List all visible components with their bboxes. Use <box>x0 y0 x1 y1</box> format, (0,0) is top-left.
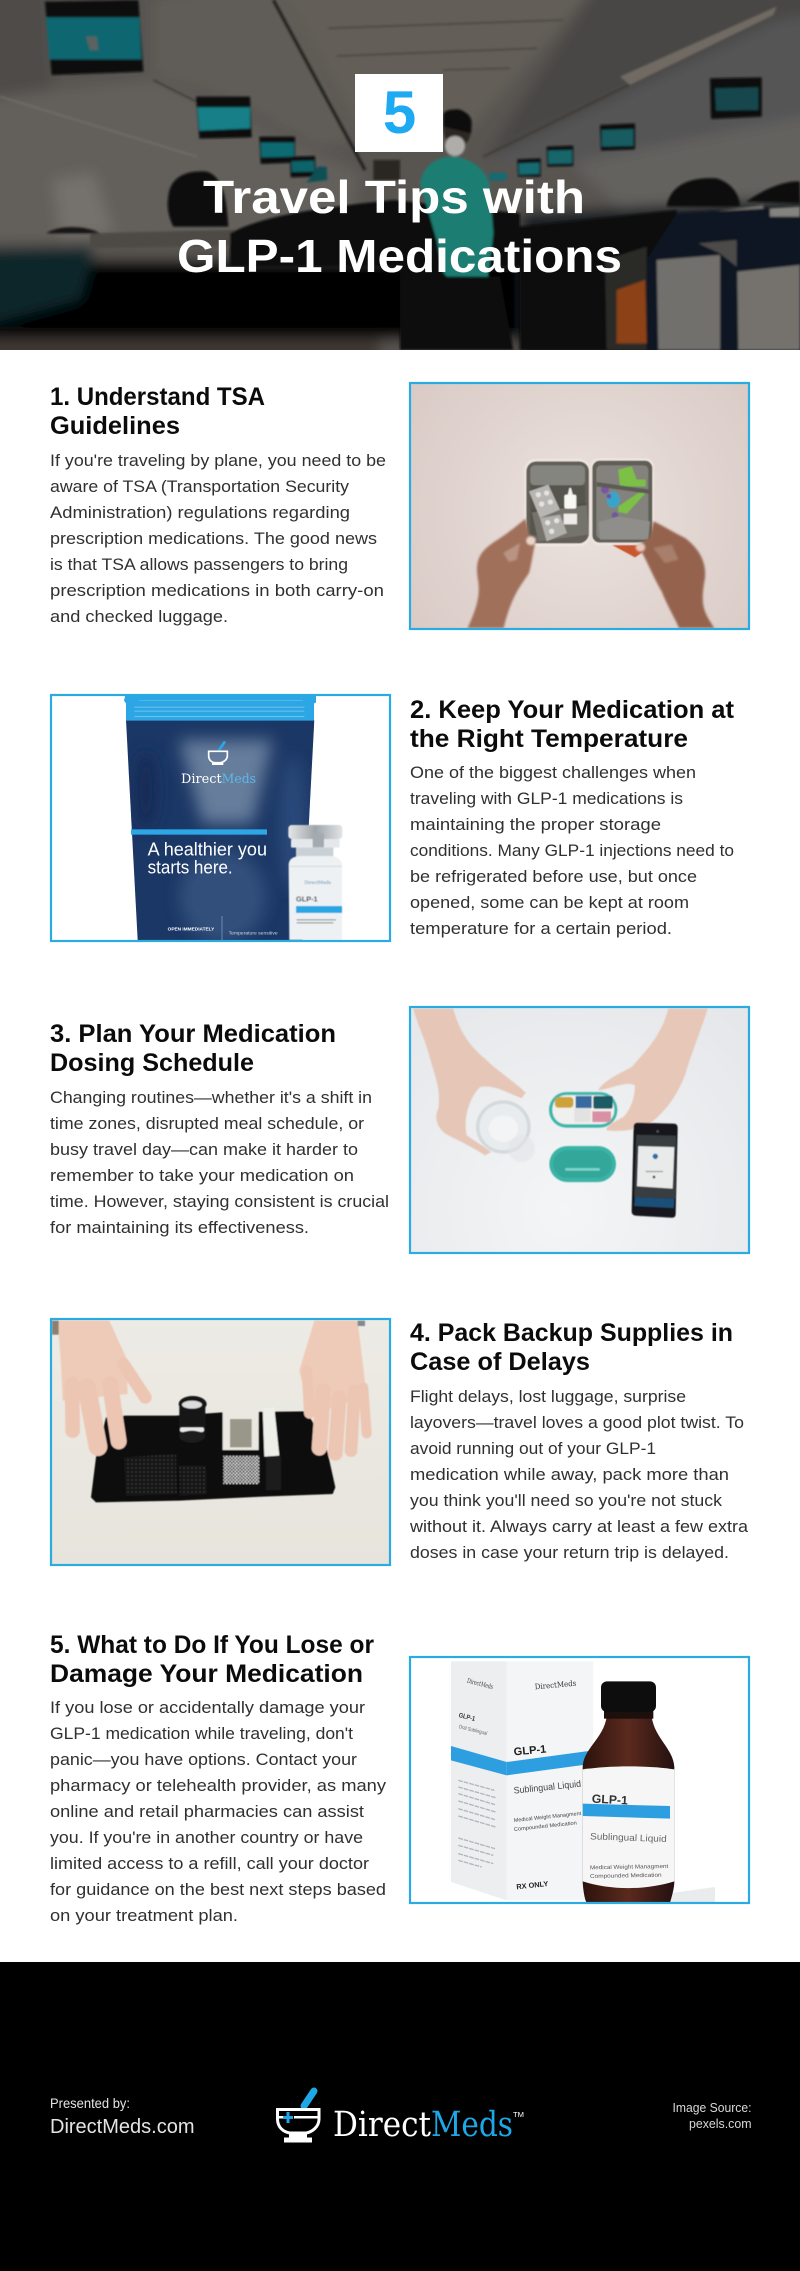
monitors <box>45 0 143 75</box>
text block: tip 5: limited access to a refill, call your doctor <box>50 1854 369 1873</box>
photo frame <box>51 695 390 941</box>
photo frame <box>410 1657 749 1903</box>
icon: mortar and pestle <box>278 2091 319 2142</box>
photo: pill organizer, glass of water and phone <box>405 1002 755 1258</box>
text block: tip 1: prescription medications. The good news <box>50 529 377 548</box>
text block: tip 1: is that TSA allows passengers to bring <box>50 555 348 574</box>
heading: tip 1: 1. Understand TSA <box>50 383 265 411</box>
panel: tip 1 <box>50 378 755 634</box>
text block: tip 3: time zones, disrupted meal schedule, or <box>50 1114 364 1133</box>
title: Travel Tips with <box>203 171 585 223</box>
photo: DirectMeds pouch and GLP-1 vial: DirectMeds <box>304 880 332 886</box>
heading: tip 4: 4. Pack Backup Supplies in <box>410 1319 733 1347</box>
text block: tip 4: without it. Always carry at least a few extra <box>409 1517 749 1536</box>
number badge <box>355 74 443 152</box>
presented by: Presented by: <box>50 2095 130 2111</box>
text block: tip 5: pharmacy or telehealth provider, as many <box>50 1776 387 1795</box>
text block: tip 1 <box>50 451 386 626</box>
photo: GLP-1 sublingual liquid box and bottle <box>451 1662 715 1902</box>
photo: DirectMeds pouch and GLP-1 vial: GLP-1 <box>296 896 318 903</box>
heading: tip 3: 3. Plan Your Medication <box>50 1020 336 1048</box>
photo: DirectMeds pouch and GLP-1 vial: Meds <box>222 771 256 786</box>
flight attendant <box>443 109 471 148</box>
text block: tip 2: opened, some can be kept at room <box>410 893 689 912</box>
text block: tip 1: aware of TSA (Transportation Security <box>50 477 350 496</box>
photo: hands and travel kit <box>46 1314 396 1570</box>
heading: tip 3: Dosing Schedule <box>50 1049 254 1077</box>
photo: GLP-1 sublingual liquid box and bottle: GLP-1 <box>513 1744 547 1758</box>
text block: tip 2: be refrigerated before use, but once <box>410 867 697 886</box>
photo: DirectMeds pouch and GLP-1 vial: OPEN IMMEDIATELY <box>168 927 214 932</box>
title <box>179 180 620 272</box>
text block: tip 4: Flight delays, lost luggage, surprise <box>410 1387 686 1406</box>
heading: tip 5 <box>50 1631 374 1688</box>
photo: GLP-1 sublingual liquid box and bottle: Compounded Medication <box>514 1820 577 1833</box>
photo: GLP-1 sublingual liquid box and bottle: Medical Weight Managment <box>590 1864 669 1871</box>
text block: tip 2: conditions. Many GLP-1 injections need to <box>410 841 734 860</box>
text block: tip 2: maintaining the proper storage <box>410 815 661 834</box>
text block: tip 1: and checked luggage. <box>50 607 228 626</box>
panel: tip 2 <box>46 690 735 950</box>
text block: tip 2: One of the biggest challenges when <box>410 763 696 782</box>
photo frame <box>410 1007 749 1253</box>
heading: tip 5: Damage Your Medication <box>50 1660 363 1688</box>
header banner <box>0 0 800 372</box>
photo: DirectMeds pouch and GLP-1 vial: A healthier you <box>148 839 267 860</box>
text block: tip 5: online and retail pharmacies can assist <box>50 1802 364 1821</box>
heading: tip 2: the Right Temperature <box>410 725 688 753</box>
text block: tip 5 <box>50 1698 387 1925</box>
text block: tip 1: prescription medications in both carry-on <box>50 581 384 600</box>
presented by: DirectMeds.com <box>50 2116 194 2138</box>
photo: GLP-1 sublingual liquid box and bottle: Oral Sublingual <box>458 1724 488 1737</box>
text block: tip 3 <box>50 1088 389 1237</box>
text block: tip 2: traveling with GLP-1 medications is <box>410 789 683 808</box>
text block: tip 5: panic—you have options. Contact your <box>50 1750 357 1769</box>
text block: tip 5: for guidance on the best next steps based <box>50 1880 386 1899</box>
photo: airplane cabin <box>0 0 800 372</box>
title: GLP-1 Medications <box>177 230 622 282</box>
logo: DirectMeds: Direct <box>333 2105 431 2145</box>
text block: tip 4: you think you'll need so you're not stuck <box>410 1491 723 1510</box>
photo: GLP-1 sublingual liquid box and bottle: GLP-1 <box>592 1792 629 1808</box>
heading: tip 4: Case of Delays <box>410 1348 590 1376</box>
panel: tip 4 <box>46 1314 749 1570</box>
text block: tip 4: avoid running out of your GLP-1 <box>410 1439 656 1458</box>
panel: tip 3 <box>50 1002 755 1258</box>
heading: tip 4 <box>410 1319 733 1376</box>
text block: tip 3: busy travel day—can make it harder to <box>50 1140 358 1159</box>
photo: GLP-1 sublingual liquid box and bottle: Sublingual Liquid <box>513 1779 582 1796</box>
text block: tip 1: Administration) regulations regarding <box>50 503 350 522</box>
photo: GLP-1 sublingual liquid box and bottle: Compounded Medication <box>590 1873 662 1880</box>
ceiling ribs and lines <box>273 0 365 170</box>
image source: Image Source: <box>672 2100 752 2115</box>
image source <box>672 2100 752 2131</box>
photo: DirectMeds pouch and GLP-1 vial: Direct <box>181 771 222 786</box>
text block: tip 5: on your treatment plan. <box>50 1906 238 1925</box>
heading: tip 3 <box>50 1020 336 1077</box>
photo: GLP-1 sublingual liquid box and bottle: RX ONLY <box>516 1879 549 1891</box>
text block: tip 3: time. However, staying consistent is crucial <box>50 1192 389 1211</box>
photo: GLP-1 sublingual liquid box and bottle: Medical Weight Managment <box>514 1811 582 1824</box>
photo: GLP-1 sublingual liquid box and bottle: DirectMeds <box>534 1679 577 1691</box>
photo: GLP-1 sublingual liquid box and bottle: Sublingual Liquid <box>590 1831 667 1844</box>
photo: DirectMeds pouch and GLP-1 vial <box>124 696 343 940</box>
right-side seats <box>667 178 740 207</box>
text block: tip 5: GLP-1 medication while traveling, don't <box>50 1724 353 1743</box>
photo: DirectMeds pouch and GLP-1 vial: starts here. <box>148 856 233 877</box>
photo frame <box>51 1319 390 1565</box>
heading: tip 2: 2. Keep Your Medication at <box>410 696 735 724</box>
heading: tip 5: 5. What to Do If You Lose or <box>50 1631 374 1659</box>
text block: tip 2 <box>410 763 734 938</box>
text block: tip 2: temperature for a certain period. <box>410 919 672 938</box>
footer <box>0 1962 800 2271</box>
text block: tip 4: layovers—travel loves a good plot twist. To <box>410 1413 744 1432</box>
photo: DirectMeds pouch and GLP-1 vial: Temperature sensitive <box>229 931 278 937</box>
photo: open medicine pouch held by hands <box>405 378 755 634</box>
heading: tip 1 <box>50 383 265 440</box>
presented by <box>50 2095 194 2138</box>
heading: tip 2 <box>410 696 735 753</box>
panel: tip 5 <box>50 1631 755 1925</box>
heading: tip 1: Guidelines <box>50 412 180 440</box>
text block: tip 3: Changing routines—whether it's a shift in <box>50 1088 372 1107</box>
text block: tip 5: you. If you're in another country or have <box>50 1828 363 1847</box>
logo: DirectMeds <box>278 2091 524 2145</box>
text block: tip 3: for maintaining its effectiveness. <box>50 1218 309 1237</box>
text block: tip 4 <box>409 1387 749 1562</box>
text block: tip 4: medication while away, pack more than <box>410 1465 729 1484</box>
photo: GLP-1 sublingual liquid box and bottle: DirectMeds <box>466 1677 494 1691</box>
text block: tip 3: remember to take your medication on <box>50 1166 354 1185</box>
number badge: 5 <box>383 79 416 146</box>
photo frame <box>410 383 749 629</box>
passenger heads <box>168 171 228 227</box>
photo: GLP-1 sublingual liquid box and bottle: GLP-1 <box>458 1712 476 1723</box>
text block: tip 1: If you're traveling by plane, you need to be <box>50 451 386 470</box>
text block: tip 4: doses in case your return trip is delayed. <box>410 1543 729 1562</box>
image source: pexels.com <box>689 2116 752 2131</box>
text block: tip 5: If you lose or accidentally damage your <box>50 1698 365 1717</box>
logo: DirectMeds: Meds <box>431 2105 513 2145</box>
logo: DirectMeds: TM <box>513 2112 524 2119</box>
